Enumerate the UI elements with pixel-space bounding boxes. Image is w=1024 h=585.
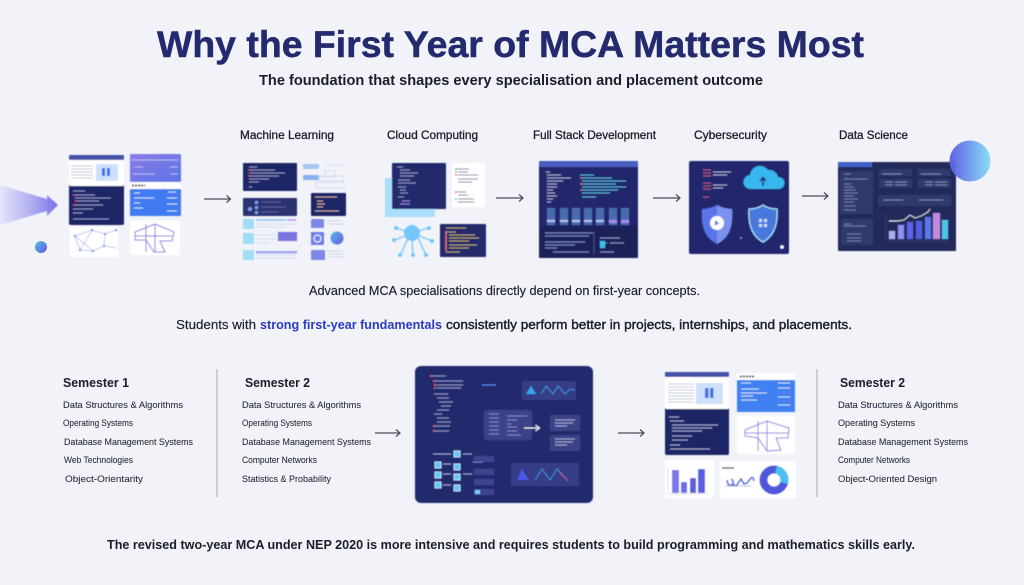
chart: purple graph network <box>737 416 795 454</box>
text: advanced specialisations: Advanced MCA specialisations directly depend on first-year concepts. <box>309 284 700 298</box>
panel: data science dashboard <box>838 162 956 251</box>
heading: Cloud Computing: Cloud Computing <box>387 128 478 142</box>
card: blue table <box>130 189 181 216</box>
dashboard tab <box>838 162 872 167</box>
column: semester 2 outcomes: Data Structures & Algorithms <box>838 400 958 411</box>
divider <box>816 369 818 497</box>
list rows <box>243 219 297 260</box>
chart: line and donut <box>720 461 796 498</box>
dark code window <box>440 224 486 257</box>
window header <box>539 161 638 167</box>
divider <box>216 369 218 497</box>
column: semester 2: Operating Systems <box>242 418 312 429</box>
stat tile text <box>882 174 947 200</box>
heading: Cybersecurity: Cybersecurity <box>694 128 767 142</box>
icon: entry arrow <box>0 185 58 225</box>
icon: shield lock <box>749 205 777 242</box>
column: semester 2: Data Structures & Algorithms <box>242 400 361 411</box>
column: semester 1: Object-Orientarity <box>65 474 143 485</box>
chart: purple graph network <box>130 221 180 255</box>
arrow <box>204 196 230 202</box>
text: strong fundamentals statement: Students with <box>176 318 256 332</box>
flow nodes <box>433 451 494 495</box>
column: semester 1: Web Technologies <box>64 455 133 466</box>
column: semester 1 <box>63 375 193 485</box>
wave card top <box>522 381 576 400</box>
column: semester 2 outcomes: Operating Systems <box>838 418 915 429</box>
panel: cloud computing <box>385 163 486 257</box>
chart: bar chart <box>665 460 714 498</box>
sidebar <box>840 171 873 245</box>
arrow <box>802 192 828 200</box>
panel: machine learning <box>243 163 346 260</box>
panel: central code and flow diagram <box>415 366 593 503</box>
dark row <box>243 198 297 216</box>
text: strong fundamentals statement: consistently perform better in projects, internships, and placements. <box>446 318 852 332</box>
stat tiles <box>878 169 951 206</box>
icon tiles <box>311 219 344 260</box>
column: semester 2 outcomes <box>838 375 968 485</box>
icon: cloud node hub <box>392 225 434 257</box>
code window <box>243 163 297 191</box>
arrow <box>653 194 680 202</box>
code area <box>546 172 626 202</box>
card: purple table <box>130 154 181 189</box>
icon: large gradient circle <box>950 140 990 182</box>
detail card and arrow <box>484 410 540 440</box>
column: semester 2 outcomes: Semester 2 <box>840 375 905 390</box>
window: algorithm visualiser <box>665 372 729 455</box>
column: semester 1: Semester 1 <box>63 375 129 390</box>
column: semester 2: Computer Networks <box>242 455 317 466</box>
arrow <box>618 430 644 436</box>
bar chart <box>886 209 949 242</box>
panel: full stack development <box>539 161 638 258</box>
dark code <box>311 193 346 216</box>
window: algorithm visualiser <box>69 155 124 225</box>
checklist card <box>452 163 485 207</box>
column: semester 2 outcomes: Computer Networks <box>838 455 910 466</box>
heading: Data Science: Data Science <box>839 128 908 142</box>
footer statement: The revised two-year MCA under NEP 2020 is more intensive and requires students to build programming and mathematics skills early. <box>107 538 915 552</box>
code listing <box>430 376 496 431</box>
code window <box>392 163 446 209</box>
arrow <box>375 430 400 436</box>
icon: shield play <box>702 205 732 244</box>
heading: Machine Learning: Machine Learning <box>240 128 334 142</box>
column: semester 2: Semester 2 <box>245 375 310 390</box>
column: semester 2 outcomes: Database Management Systems <box>838 437 968 448</box>
side cards <box>550 415 580 451</box>
column: semester 2: Statistics & Probability <box>242 474 331 485</box>
subtitle: The foundation that shapes every specialisation and placement outcome <box>259 72 763 89</box>
column: semester 2 outcomes: Object-Oriented Design <box>838 474 937 485</box>
text: strong fundamentals statement <box>176 318 852 332</box>
column: semester 2: Database Management Systems <box>242 437 371 448</box>
small status dots <box>740 237 784 249</box>
icon: cloud upload <box>743 166 785 189</box>
title: Why the First Year of MCA Matters Most <box>157 24 864 65</box>
icon: small gradient dot <box>35 241 47 253</box>
panel: first-year fundamentals collage <box>69 154 181 257</box>
flow diagram <box>303 164 344 188</box>
light blue backing card <box>385 178 435 217</box>
panel: cybersecurity <box>689 161 789 254</box>
text: strong fundamentals statement: strong first-year fundamentals <box>260 318 442 332</box>
column: semester 1: Database Management Systems <box>64 437 193 448</box>
wave card bottom <box>511 463 579 486</box>
lower console <box>539 226 638 258</box>
chart: graph network <box>70 227 118 257</box>
heading: Full Stack Development: Full Stack Development <box>533 128 657 142</box>
server columns <box>547 208 629 225</box>
arrow <box>496 194 523 202</box>
column: semester 1: Data Structures & Algorithms <box>63 400 183 411</box>
card: blue table <box>737 373 795 412</box>
code snippets <box>703 170 731 197</box>
column: semester 2 <box>242 375 371 485</box>
panel: outcome collage <box>665 372 796 498</box>
column: semester 1: Operating Systems <box>63 418 133 429</box>
